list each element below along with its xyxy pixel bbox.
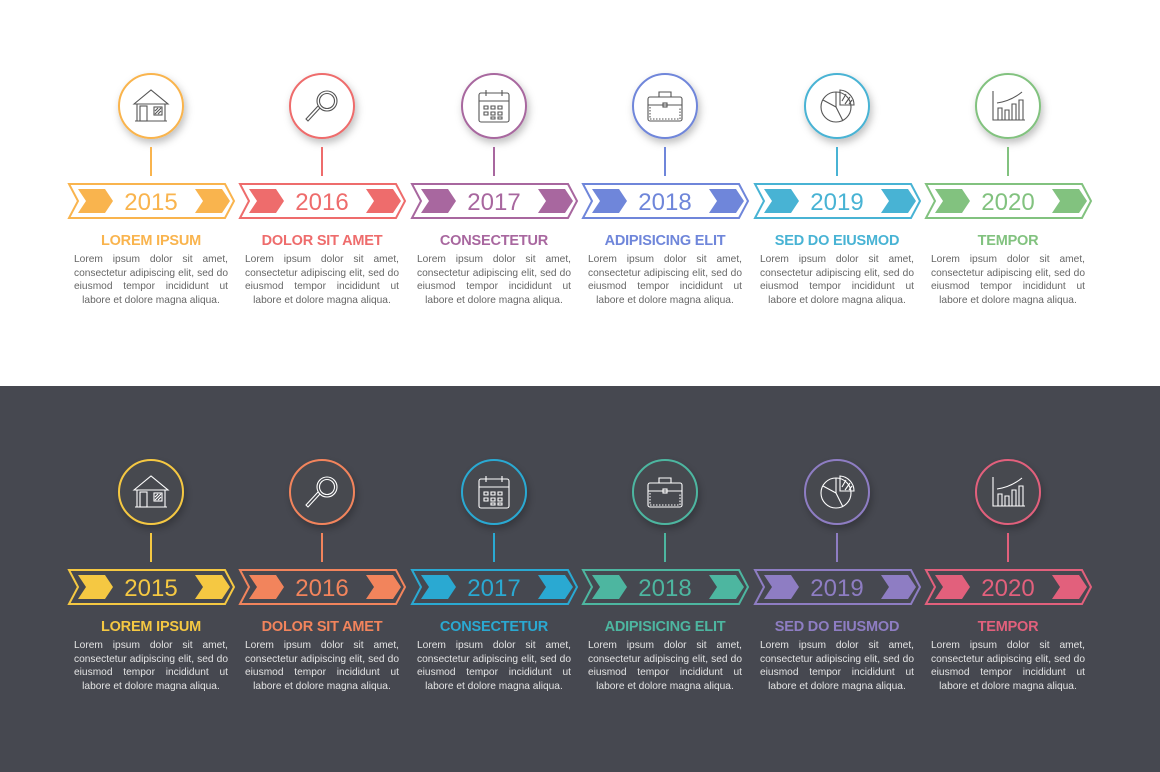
step 2016 (top): 2016: [295, 189, 349, 216]
step 2016 (top): [238, 73, 406, 306]
step 2017 (dark): [410, 459, 578, 692]
step 2015 (dark): 2015: [124, 575, 178, 602]
step 2020 (dark): TEMPOR: [978, 619, 1038, 635]
step 2016 (top): DOLOR SIT AMET: [262, 233, 382, 249]
dark bottom section background: [0, 386, 1160, 772]
step 2018 (dark): [581, 459, 749, 692]
step 2020 (dark): 2020: [981, 575, 1035, 602]
step 2016 (dark): Lorem ipsum dolor sit amet, consectetur adipiscing elit, sed do eiusmod tempor incididunt ut labore et dolore magna aliqua.: [245, 640, 399, 692]
step 2017 (dark): 2017: [467, 575, 521, 602]
step 2017 (dark): CONSECTETUR: [440, 619, 548, 635]
step 2019 (top): Lorem ipsum dolor sit amet, consectetur adipiscing elit, sed do eiusmod tempor incididunt ut labore et dolore magna aliqua.: [760, 254, 914, 306]
step 2019 (top): SED DO EIUSMOD: [775, 233, 899, 249]
step 2019 (dark): SED DO EIUSMOD: [775, 619, 899, 635]
step 2019 (top): [753, 73, 922, 306]
step 2016 (dark): DOLOR SIT AMET: [262, 619, 382, 635]
step 2015 (top): LOREM IPSUM: [101, 233, 201, 249]
step 2018 (dark): ADIPISICING ELIT: [605, 619, 725, 635]
step 2018 (top): Lorem ipsum dolor sit amet, consectetur adipiscing elit, sed do eiusmod tempor incididunt ut labore et dolore magna aliqua.: [588, 254, 742, 306]
step 2017 (top): Lorem ipsum dolor sit amet, consectetur adipiscing elit, sed do eiusmod tempor incididunt ut labore et dolore magna aliqua.: [417, 254, 571, 306]
step 2020 (top): 2020: [981, 189, 1035, 216]
step 2017 (top): CONSECTETUR: [440, 233, 548, 249]
step 2020 (top): Lorem ipsum dolor sit amet, consectetur adipiscing elit, sed do eiusmod tempor incididunt ut labore et dolore magna aliqua.: [931, 254, 1085, 306]
step 2015 (top): Lorem ipsum dolor sit amet, consectetur adipiscing elit, sed do eiusmod tempor incididunt ut labore et dolore magna aliqua.: [74, 254, 228, 306]
step 2018 (dark): 2018: [638, 575, 692, 602]
step 2019 (top): 2019: [810, 189, 864, 216]
panel: top timeline: [67, 73, 1092, 306]
step 2017 (top): [410, 73, 578, 306]
step 2015 (dark): [67, 459, 236, 692]
step 2016 (dark): [238, 459, 406, 692]
step 2018 (top): [581, 73, 750, 306]
step 2015 (dark): Lorem ipsum dolor sit amet, consectetur adipiscing elit, sed do eiusmod tempor incididunt ut labore et dolore magna aliqua.: [74, 640, 228, 692]
step 2016 (dark): 2016: [295, 575, 349, 602]
step 2020 (dark): Lorem ipsum dolor sit amet, consectetur adipiscing elit, sed do eiusmod tempor incididunt ut labore et dolore magna aliqua.: [931, 640, 1085, 692]
step 2020 (top): TEMPOR: [978, 233, 1038, 249]
step 2020 (dark): [924, 459, 1092, 692]
step 2015 (top): 2015: [124, 189, 178, 216]
step 2017 (dark): Lorem ipsum dolor sit amet, consectetur adipiscing elit, sed do eiusmod tempor incididunt ut labore et dolore magna aliqua.: [417, 640, 571, 692]
step 2020 (top): [924, 73, 1092, 306]
step 2019 (dark): Lorem ipsum dolor sit amet, consectetur adipiscing elit, sed do eiusmod tempor incididunt ut labore et dolore magna aliqua.: [760, 640, 914, 692]
step 2019 (dark): [753, 459, 921, 692]
step 2018 (dark): Lorem ipsum dolor sit amet, consectetur adipiscing elit, sed do eiusmod tempor incididunt ut labore et dolore magna aliqua.: [588, 640, 742, 692]
step 2018 (top): ADIPISICING ELIT: [605, 233, 725, 249]
step 2015 (dark): LOREM IPSUM: [101, 619, 201, 635]
step 2016 (top): Lorem ipsum dolor sit amet, consectetur adipiscing elit, sed do eiusmod tempor incididunt ut labore et dolore magna aliqua.: [245, 254, 399, 306]
step 2019 (dark): 2019: [810, 575, 864, 602]
step 2015 (top): [67, 73, 236, 306]
step 2018 (top): 2018: [638, 189, 692, 216]
step 2017 (top): 2017: [467, 189, 521, 216]
panel: bottom timeline (dark): [67, 459, 1092, 692]
